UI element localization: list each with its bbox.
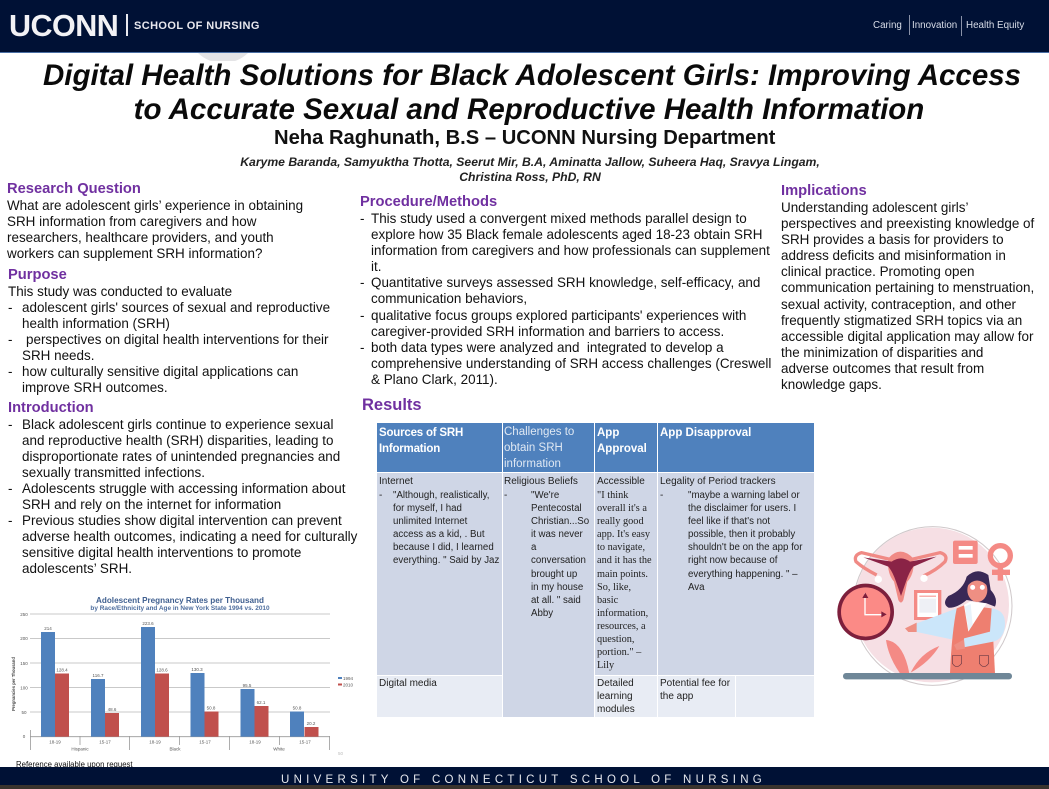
table header: challenges: Challenges to <box>504 426 574 438</box>
cell: accessible: information, <box>597 608 648 619</box>
cell: internet: access as a kid, . But <box>393 529 485 540</box>
bar chart: adolescent pregnancy rates: 95.5 <box>243 683 252 688</box>
results table <box>377 423 814 717</box>
text: procedure/methods: it. <box>371 259 381 274</box>
character: nurse <box>905 571 1005 673</box>
bar chart: adolescent pregnancy rates: 100 <box>20 686 28 690</box>
bar chart: adolescent pregnancy rates: Adolescent Pregnancy Rates per Thousand <box>96 596 264 605</box>
cell: accessible: basic <box>597 595 618 606</box>
cell: religious beliefs: brought up <box>531 569 577 580</box>
cell: legality of period trackers: Legality of Period trackers <box>660 476 776 487</box>
cell: accessible: main points. <box>597 569 648 580</box>
heading: introduction: Introduction <box>8 400 94 416</box>
text: procedure/methods: both data types were analyzed and integrated to develop a <box>371 340 724 355</box>
bar chart: adolescent pregnancy rates: 223.6 <box>142 621 154 626</box>
text: procedure/methods: - <box>360 211 364 226</box>
bar chart: adolescent pregnancy rates: 18-19 <box>149 740 161 744</box>
text: implications: adverse outcomes that result from <box>781 361 984 376</box>
cell: accessible: portion." – <box>597 647 641 658</box>
text: implications: communication pertaining to menstruation, <box>781 280 1034 295</box>
cell: accessible: and it has the <box>597 555 652 566</box>
cell: religious beliefs: Abby <box>531 608 553 619</box>
cell: internet: everything. " Said by Jaz <box>393 555 499 566</box>
text: introduction: Black adolescent girls continue to experience sexual <box>22 417 333 432</box>
text: purpose: SRH needs. <box>22 348 94 363</box>
text: research question: What are adolescent girls’ experience in obtaining <box>7 198 303 213</box>
cell: accessible: "I think <box>597 490 628 501</box>
text: purpose: This study was conducted to evaluate <box>8 284 232 299</box>
cell: accessible: app. It's easy <box>597 529 650 540</box>
table header: sources: Sources of SRH <box>379 427 463 439</box>
bar chart: adolescent pregnancy rates: 0 <box>23 734 26 739</box>
co-authors: Karyme Baranda, Samyuktha Thotta, Seerut Mir, B.A, Aminatta Jallow, Suheera Haq, Sravya Lingam, <box>240 155 820 169</box>
bar chart: adolescent pregnancy rates: 15-17 <box>99 740 111 744</box>
table header: challenges: information <box>504 458 561 470</box>
bar chart: adolescent pregnancy rates: Black <box>169 746 181 752</box>
background circle <box>854 528 1009 682</box>
heading: implications: Implications <box>781 183 867 199</box>
text: procedure/methods: caregiver-provided SRH information and barriers to access. <box>371 324 724 339</box>
cell: religious beliefs: Pentecostal <box>531 503 582 514</box>
text: purpose: perspectives on digital health interventions for their <box>26 332 329 347</box>
bar chart: adolescent pregnancy rates: by Race/Ethnicity and Age in New York State 1994 vs. 2010 <box>90 605 270 612</box>
bar chart: adolescent pregnancy rates: 130.3 <box>191 667 203 672</box>
cell: legality of period trackers: right now because of <box>688 555 777 566</box>
bar chart: adolescent pregnancy rates: 1994 <box>343 676 354 681</box>
text: implications: perspectives and preexisting knowledge of <box>781 216 1034 231</box>
presenting author: Neha Raghunath, B.S – UCONN Nursing Department <box>274 127 775 149</box>
bar chart: adolescent pregnancy rates: Pregnancies per Thousand <box>11 657 16 711</box>
text: introduction <box>8 417 358 576</box>
values: caring, innovation, health equity: Caring <box>873 20 902 31</box>
text: implications: accessible digital application may allow for <box>781 329 1033 344</box>
cell: legality of period trackers: Ava <box>688 582 705 593</box>
bar chart: adolescent pregnancy rates: 50 <box>21 710 27 715</box>
bar chart: adolescent pregnancy rates: 50.8 <box>207 706 216 710</box>
text: implications <box>781 200 1034 392</box>
bar chart: adolescent pregnancy rates: 214 <box>44 626 52 631</box>
co-authors <box>240 155 820 184</box>
title <box>43 59 1021 126</box>
table header: challenges: obtain SRH <box>504 442 563 454</box>
text: procedure/methods: - <box>360 340 364 355</box>
text: procedure/methods: This study used a convergent mixed methods parallel design to <box>371 211 747 226</box>
cell: legality of period trackers: everything happening. " – <box>688 569 798 580</box>
text: introduction: - <box>8 481 12 496</box>
bar chart: adolescent pregnancy rates <box>11 596 354 756</box>
table edge <box>843 673 1012 679</box>
bar chart: adolescent pregnancy rates: 200 <box>20 636 28 641</box>
cell: potential fee: Potential fee for <box>660 678 730 689</box>
bar chart: adolescent pregnancy rates: 20.2 <box>307 721 316 726</box>
cell: religious beliefs: Christian...So <box>531 516 589 527</box>
text: research question: researchers, healthcare providers, and youth <box>7 230 274 245</box>
text: implications: address deficits and misinformation in <box>781 248 1006 263</box>
cell: religious beliefs <box>503 473 594 717</box>
icon: clock <box>837 584 894 640</box>
footer band <box>0 767 1049 789</box>
text: introduction: - <box>8 513 12 528</box>
table header: app approval: Approval <box>597 443 647 455</box>
text: introduction: - <box>8 417 12 432</box>
text: introduction: Adolescents struggle with accessing information about <box>22 481 345 496</box>
text: introduction: SRH and rely on the internet for information <box>22 497 281 512</box>
bar chart: adolescent pregnancy rates: 128.6 <box>156 668 168 672</box>
bar chart: adolescent pregnancy rates: 2010 <box>343 682 354 687</box>
cell: internet: because I did, I learned <box>393 542 494 553</box>
cell: accessible <box>595 473 657 675</box>
cell: legality of period trackers: "maybe a warning label or <box>688 490 800 501</box>
cell: religious beliefs: it was never <box>531 529 583 540</box>
text: purpose: - <box>8 364 12 379</box>
bar chart: adolescent pregnancy rates: 116.7 <box>93 673 104 678</box>
cell: legality of period trackers: shouldn't be on the app for <box>688 542 802 553</box>
icon: leaves <box>886 640 939 673</box>
cell: religious beliefs: in my house <box>531 582 583 593</box>
text: introduction: adolescents’ SRH. <box>22 561 132 576</box>
bar chart: adolescent pregnancy rates: 15-17 <box>299 740 311 744</box>
cell: internet: Internet <box>379 476 413 487</box>
cell: internet <box>377 473 502 675</box>
cell: empty <box>736 676 814 717</box>
cell: digital media: Digital media <box>379 678 437 689</box>
text: research question: workers can supplement SRH information? <box>7 246 262 261</box>
seal fragment <box>198 53 248 61</box>
icon: equals sign square <box>953 541 978 564</box>
cell: digital media <box>377 676 502 717</box>
cell: religious beliefs: Religious Beliefs <box>504 476 578 487</box>
bar chart: adolescent pregnancy rates: 50.8 <box>293 706 302 710</box>
text: purpose: how culturally sensitive digital applications can <box>22 364 298 379</box>
text: procedure/methods <box>360 211 771 387</box>
cell: accessible: overall it's a <box>597 503 647 514</box>
text: introduction: Previous studies show digital intervention can prevent <box>22 513 342 528</box>
text: purpose: improve SRH outcomes. <box>22 380 168 395</box>
cell: detailed learning modules: modules <box>597 704 635 715</box>
values: caring, innovation, health equity: Innovation <box>912 20 957 31</box>
icon: document <box>914 590 941 620</box>
title: to Accurate Sexual and Reproductive Health Information <box>134 93 924 126</box>
cell: religious beliefs: "We're <box>531 490 559 501</box>
cell: detailed learning modules: Detailed <box>597 678 634 689</box>
bar chart: adolescent pregnancy rates: 128.4 <box>56 668 68 672</box>
cell: accessible: really good <box>597 516 644 527</box>
illustration: nurse presenting reproductive health <box>837 526 1013 686</box>
table header: app approval <box>595 423 657 472</box>
text: implications: Understanding adolescent girls’ <box>781 200 968 215</box>
text: purpose: health information (SRH) <box>22 316 170 331</box>
text: implications: SRH provides a basis for providers to <box>781 232 1004 247</box>
cell: accessible: Accessible <box>597 476 645 487</box>
cell: legality of period trackers: the disclaimer for users. I <box>688 503 796 514</box>
table header: app disapproval: App Disapproval <box>660 427 751 439</box>
bar chart: adolescent pregnancy rates: 250 <box>20 612 28 617</box>
cell: religious beliefs: conversation <box>531 555 586 566</box>
table header: app approval: App <box>597 427 619 439</box>
cell: accessible: So, like, <box>597 582 631 593</box>
cell: religious beliefs: - <box>504 490 507 501</box>
bar chart: adolescent pregnancy rates: 62.1 <box>257 700 266 705</box>
cell: accessible: Lily <box>597 660 614 671</box>
cell: internet: unlimited Internet <box>393 516 467 527</box>
logo divider <box>126 14 128 36</box>
values: caring, innovation, health equity: Health Equity <box>966 20 1024 31</box>
cell: religious beliefs: at all. " said <box>531 595 581 606</box>
text: procedure/methods: communication behaviors, <box>371 291 527 306</box>
title: Digital Health Solutions for Black Adolescent Girls: Improving Access <box>43 59 1021 92</box>
cell: religious beliefs: a <box>531 542 536 553</box>
values: caring, innovation, health equity <box>873 15 1024 36</box>
text: procedure/methods: & Plano Clark, 2011). <box>371 372 498 387</box>
bar chart: adolescent pregnancy rates: Hispanic <box>71 746 89 752</box>
bar chart: adolescent pregnancy rates: 18-19 <box>49 740 61 744</box>
cell: legality of period trackers: - <box>660 490 663 501</box>
reference note: Reference available upon request <box>16 760 133 769</box>
icon: uterus <box>855 552 946 602</box>
text: implications: sexual activity, contraception, and other <box>781 297 1016 312</box>
text: introduction: and reproductive health (SRH) disparities, leading to <box>22 433 333 448</box>
heading: research question: Research Question <box>7 181 141 197</box>
text: procedure/methods: - <box>360 275 364 290</box>
text: procedure/methods: - <box>360 308 364 323</box>
logo: UCONN: UCONN <box>9 9 118 43</box>
heading: results: Results <box>362 396 422 414</box>
heading: purpose: Purpose <box>8 267 67 283</box>
header band <box>0 0 1049 53</box>
text: introduction: adverse health outcomes, indicating a need for culturally <box>22 529 357 544</box>
table header: sources <box>377 423 502 472</box>
text: procedure/methods: qualitative focus groups explored participants' experiences with <box>371 308 746 323</box>
text: implications: frequently stigmatized SRH topics via an <box>781 313 1022 328</box>
icon: female symbol <box>990 546 1010 581</box>
co-authors: Christina Ross, PhD, RN <box>459 170 601 184</box>
text: introduction: sexually transmitted infections. <box>22 465 205 480</box>
cell: potential fee <box>658 676 735 717</box>
text: purpose: adolescent girls' sources of sexual and reproductive <box>22 300 330 315</box>
cell: detailed learning modules <box>595 676 657 717</box>
cell: legality of period trackers: feel like if that's not <box>688 516 770 527</box>
cell: accessible: to navigate, <box>597 542 645 553</box>
footer text: UNIVERSITY OF CONNECTICUT SCHOOL OF NURSING <box>281 774 766 786</box>
cell: legality of period trackers <box>658 473 814 675</box>
bar chart: adolescent pregnancy rates: 150 <box>20 661 28 666</box>
cell: accessible: question, <box>597 634 634 645</box>
bar chart: adolescent pregnancy rates: 48.6 <box>108 707 117 712</box>
cell: potential fee: the app <box>660 691 693 702</box>
cell: internet: for myself, I had <box>393 503 462 514</box>
text: implications: knowledge gaps. <box>781 377 882 392</box>
cell: internet: - <box>379 490 382 501</box>
text: research question: SRH information from caregivers and how <box>7 214 256 229</box>
text: purpose <box>8 284 330 395</box>
bar chart: adolescent pregnancy rates: White <box>273 746 285 752</box>
school name: SCHOOL OF NURSING <box>134 20 260 32</box>
cell: detailed learning modules: learning <box>597 691 633 702</box>
footer accent <box>0 785 1049 789</box>
bar chart: adolescent pregnancy rates: 18-19 <box>249 740 261 744</box>
bar chart: adolescent pregnancy rates: 50 <box>338 751 344 756</box>
text: introduction: sensitive digital health interventions to promote <box>22 545 301 560</box>
text: research question <box>7 198 303 261</box>
text: introduction: disproportionate rates of unintended pregnancies and <box>22 449 340 464</box>
text: procedure/methods: Quantitative surveys assessed SRH knowledge, self-efficacy, and <box>371 275 760 290</box>
table header: challenges <box>503 423 594 472</box>
heading: procedure/methods: Procedure/Methods <box>360 194 497 210</box>
cell: accessible: resources, a <box>597 621 646 632</box>
text: procedure/methods: explore how 35 Black female adolescents aged 18-23 obtain SRH <box>371 227 762 242</box>
text: procedure/methods: information from caregivers and how professionals can supplement <box>371 243 770 258</box>
text: purpose: - <box>8 332 12 347</box>
cell: legality of period trackers: possible, then it probably <box>688 529 795 540</box>
bar chart: adolescent pregnancy rates: 15-17 <box>199 740 211 744</box>
cell: internet: "Although, realistically, <box>393 490 489 501</box>
text: purpose: - <box>8 300 12 315</box>
text: implications: clinical practice. Promoting open <box>781 264 974 279</box>
text: procedure/methods: comprehensive understanding of SRH access challenges (Creswell <box>371 356 771 371</box>
table header: sources: Information <box>379 443 440 455</box>
table header: app disapproval <box>658 423 814 472</box>
text: implications: the minimization of disparities and <box>781 345 983 360</box>
